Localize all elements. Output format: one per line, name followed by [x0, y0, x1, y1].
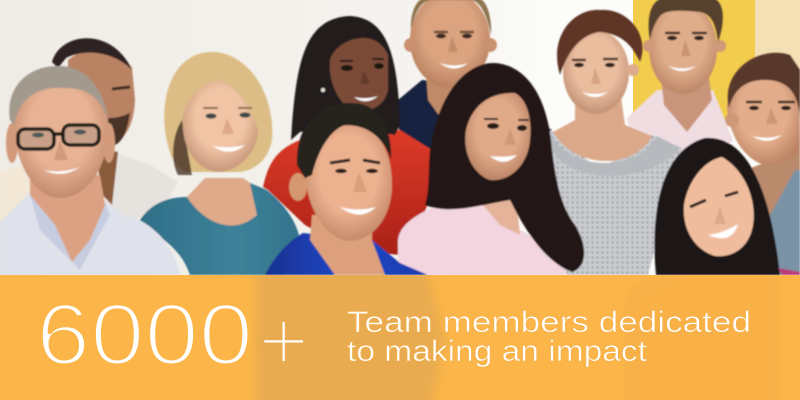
caption: team members text: [347, 306, 751, 368]
photo background wall: [0, 0, 800, 280]
person: man in blue polo: [265, 103, 428, 275]
person: top centre man in navy polo: [398, 0, 552, 165]
person: woman in red top: [263, 16, 440, 255]
person: young woman laughing: [654, 138, 800, 275]
caption line 2: to making an impact: [347, 335, 648, 368]
headline number: 6000+: [36, 287, 309, 390]
person: right man in denim shirt: [725, 53, 800, 275]
photo: team group: [0, 0, 800, 275]
person: centre right woman in grey sweater: [550, 10, 682, 275]
orange caption band: [0, 265, 800, 400]
digits: 6000: [36, 287, 253, 383]
plus sign: +: [258, 291, 309, 390]
caption line 1: Team members dedicated: [347, 306, 751, 339]
person: woman with long dark hair in pink blouse: [398, 63, 584, 275]
person: back left man: [0, 38, 178, 275]
person: top right man in pale shirt: [627, 0, 733, 175]
person: man with glasses: [0, 66, 180, 275]
person: blonde woman in teal top: [140, 52, 299, 275]
